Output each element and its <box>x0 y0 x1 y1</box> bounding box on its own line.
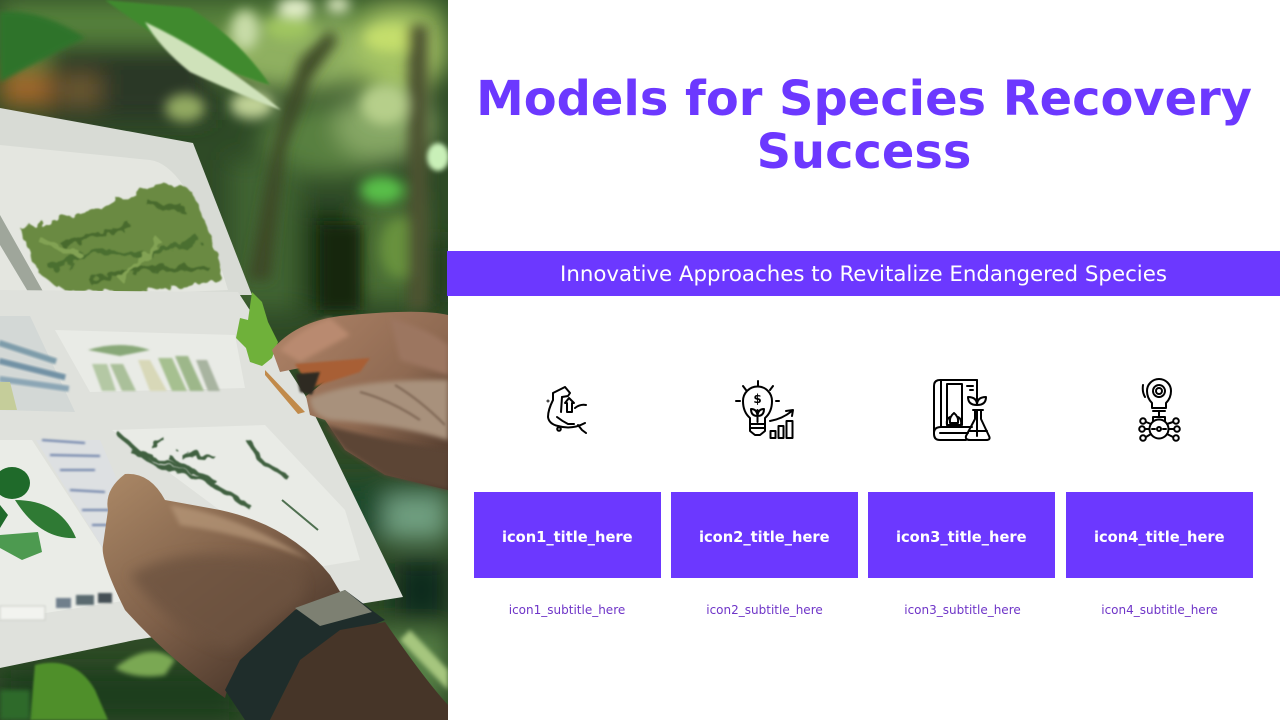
lower hand with watch <box>103 474 448 720</box>
photo: hands holding species report in forest <box>0 0 448 720</box>
card: icon 2 title <box>671 492 858 578</box>
icon: light bulb with dollar and growth chart: $ <box>753 392 762 406</box>
foreground leaves <box>0 0 449 720</box>
subtitle band: Innovative Approaches to Revitalize Endangered Species <box>560 262 1167 287</box>
card: icon 1 title: icon1_title_here <box>502 529 633 546</box>
illustration: green leaves on report <box>0 467 76 560</box>
upper hand <box>265 312 448 490</box>
card: icon 3 title <box>868 492 1054 578</box>
card: icon 4 title <box>1066 492 1252 578</box>
card: icon 1 title <box>474 492 660 578</box>
small leaf held in hand <box>236 292 278 366</box>
text: icon 4 subtitle: icon4_subtitle_here <box>1101 603 1218 617</box>
subtitle band <box>447 251 1280 296</box>
card: icon 3 title: icon3_title_here <box>896 529 1027 546</box>
card: icon 2 title: icon2_title_here <box>699 529 830 546</box>
icon: light bulb with dollar and growth chart <box>735 380 794 439</box>
text: icon 1 subtitle: icon1_subtitle_here <box>509 603 625 617</box>
icon: book with plant and flask <box>933 379 991 441</box>
icon: flexed arm with up arrow <box>546 386 587 434</box>
title: Models for Species Recovery Success <box>476 72 1252 180</box>
text: icon 3 subtitle: icon3_subtitle_here <box>904 603 1021 617</box>
card: icon 4 title: icon4_title_here <box>1094 529 1225 546</box>
report sheets <box>0 108 403 668</box>
icon: gear bulb with circuit nodes <box>1138 378 1181 442</box>
text: icon 2 subtitle: icon2_subtitle_here <box>706 603 823 617</box>
